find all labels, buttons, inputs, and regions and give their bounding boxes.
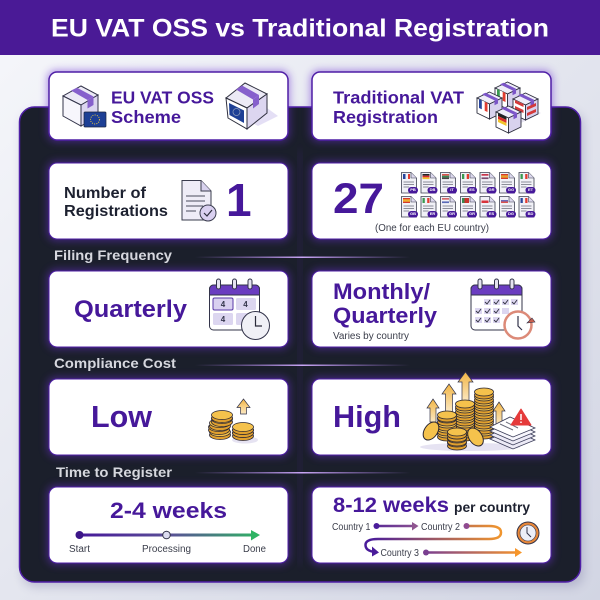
flow: country by country xyxy=(332,522,522,559)
value: 8-12 weeks xyxy=(333,493,449,517)
icon: clock xyxy=(517,522,539,544)
card: time to register traditional xyxy=(312,487,551,563)
card: filing frequency traditional xyxy=(312,271,551,347)
icon: grid of country documents: GR xyxy=(488,187,495,192)
icon: monthly calendar with recurring clock xyxy=(471,279,535,338)
flow: country by country: Country 3 xyxy=(380,548,419,559)
card: Traditional VAT Registration header xyxy=(312,72,551,140)
section heading: Time to Register: Time to Register xyxy=(56,464,173,480)
icon: small coin stacks with arrow xyxy=(208,399,258,444)
card: EU VAT OSS Scheme header xyxy=(49,72,288,140)
label: Number of xyxy=(64,185,147,202)
icon: grid of country documents: DG xyxy=(508,211,514,216)
icon: quarterly calendar with clock: 4 xyxy=(243,300,248,309)
title banner xyxy=(0,0,600,55)
value: 2-4 weeks xyxy=(110,498,227,523)
icon: grid of country documents xyxy=(402,172,536,218)
heading: EU VAT OSS xyxy=(111,88,214,108)
heading xyxy=(111,88,214,127)
card: compliance cost OSS xyxy=(49,379,288,455)
icon: grid of country documents: ET xyxy=(528,187,534,192)
icon: document with check xyxy=(182,180,216,221)
heading: Registration xyxy=(333,107,438,127)
value: per country xyxy=(454,499,530,515)
icon: grid of country documents: ES xyxy=(489,211,494,216)
flow: country by country: Country 2 xyxy=(421,522,460,533)
title banner: EU VAT OSS vs Traditional Registration xyxy=(51,14,549,42)
dark comparison panel xyxy=(20,107,584,587)
value: Quarterly xyxy=(333,303,438,328)
note: Varies by country xyxy=(333,331,409,342)
caption: (One for each EU country) xyxy=(375,222,489,234)
heading: Traditional VAT xyxy=(333,88,464,108)
icon: quarterly calendar with clock: 4 xyxy=(221,315,226,324)
icon: grid of country documents: BD xyxy=(528,211,533,216)
label xyxy=(64,185,168,220)
section heading: Filing Frequency: Filing Frequency xyxy=(54,247,172,263)
timeline: start to done: Start xyxy=(69,544,90,555)
timeline: start to done: Processing xyxy=(142,544,191,555)
icon: parcel with EU label xyxy=(226,83,278,129)
card: number of registrations traditional xyxy=(312,163,551,239)
card: compliance cost traditional xyxy=(312,372,551,455)
value: High xyxy=(333,400,401,434)
icon: grid of country documents: GG xyxy=(508,187,514,192)
card glows xyxy=(47,70,553,565)
icon: tall coin stacks, arrows and warning papers xyxy=(420,372,535,451)
icon: quarterly calendar with clock xyxy=(210,279,270,340)
timeline: start to done xyxy=(69,530,266,555)
icon: grid of country documents: DB xyxy=(430,187,435,192)
card: number of registrations OSS xyxy=(49,163,288,239)
value xyxy=(333,279,438,328)
section heading: Compliance Cost: Compliance Cost xyxy=(54,355,176,371)
card: time to register OSS xyxy=(49,487,288,563)
heading: Scheme xyxy=(111,107,181,127)
value xyxy=(333,493,530,517)
icon: quarterly calendar with clock: 4 xyxy=(221,300,226,309)
icon: grid of country documents: ES xyxy=(469,187,475,192)
icon: grid of country documents: GR xyxy=(469,211,475,216)
value: 1 xyxy=(226,174,252,226)
label: Registrations xyxy=(64,203,168,220)
icon: grid of country documents: IT xyxy=(450,187,454,192)
icon: grid of country documents: GB xyxy=(410,211,416,216)
value: Low xyxy=(91,400,152,434)
value: Quarterly xyxy=(74,296,187,323)
icon: grid of country documents: GR xyxy=(449,211,455,216)
value: 27 xyxy=(333,175,384,223)
icon: grid of country documents: PB xyxy=(410,187,416,192)
card: filing frequency OSS xyxy=(49,271,288,347)
timeline: start to done: Done xyxy=(243,544,266,555)
icon: grid of country documents: ER xyxy=(430,211,435,216)
icon: four parcels with flags xyxy=(477,82,541,133)
icon: parcel with EU flag xyxy=(63,86,106,127)
flow: country by country: Country 1 xyxy=(332,522,371,533)
value: Monthly/ xyxy=(333,279,431,304)
heading xyxy=(333,88,464,127)
